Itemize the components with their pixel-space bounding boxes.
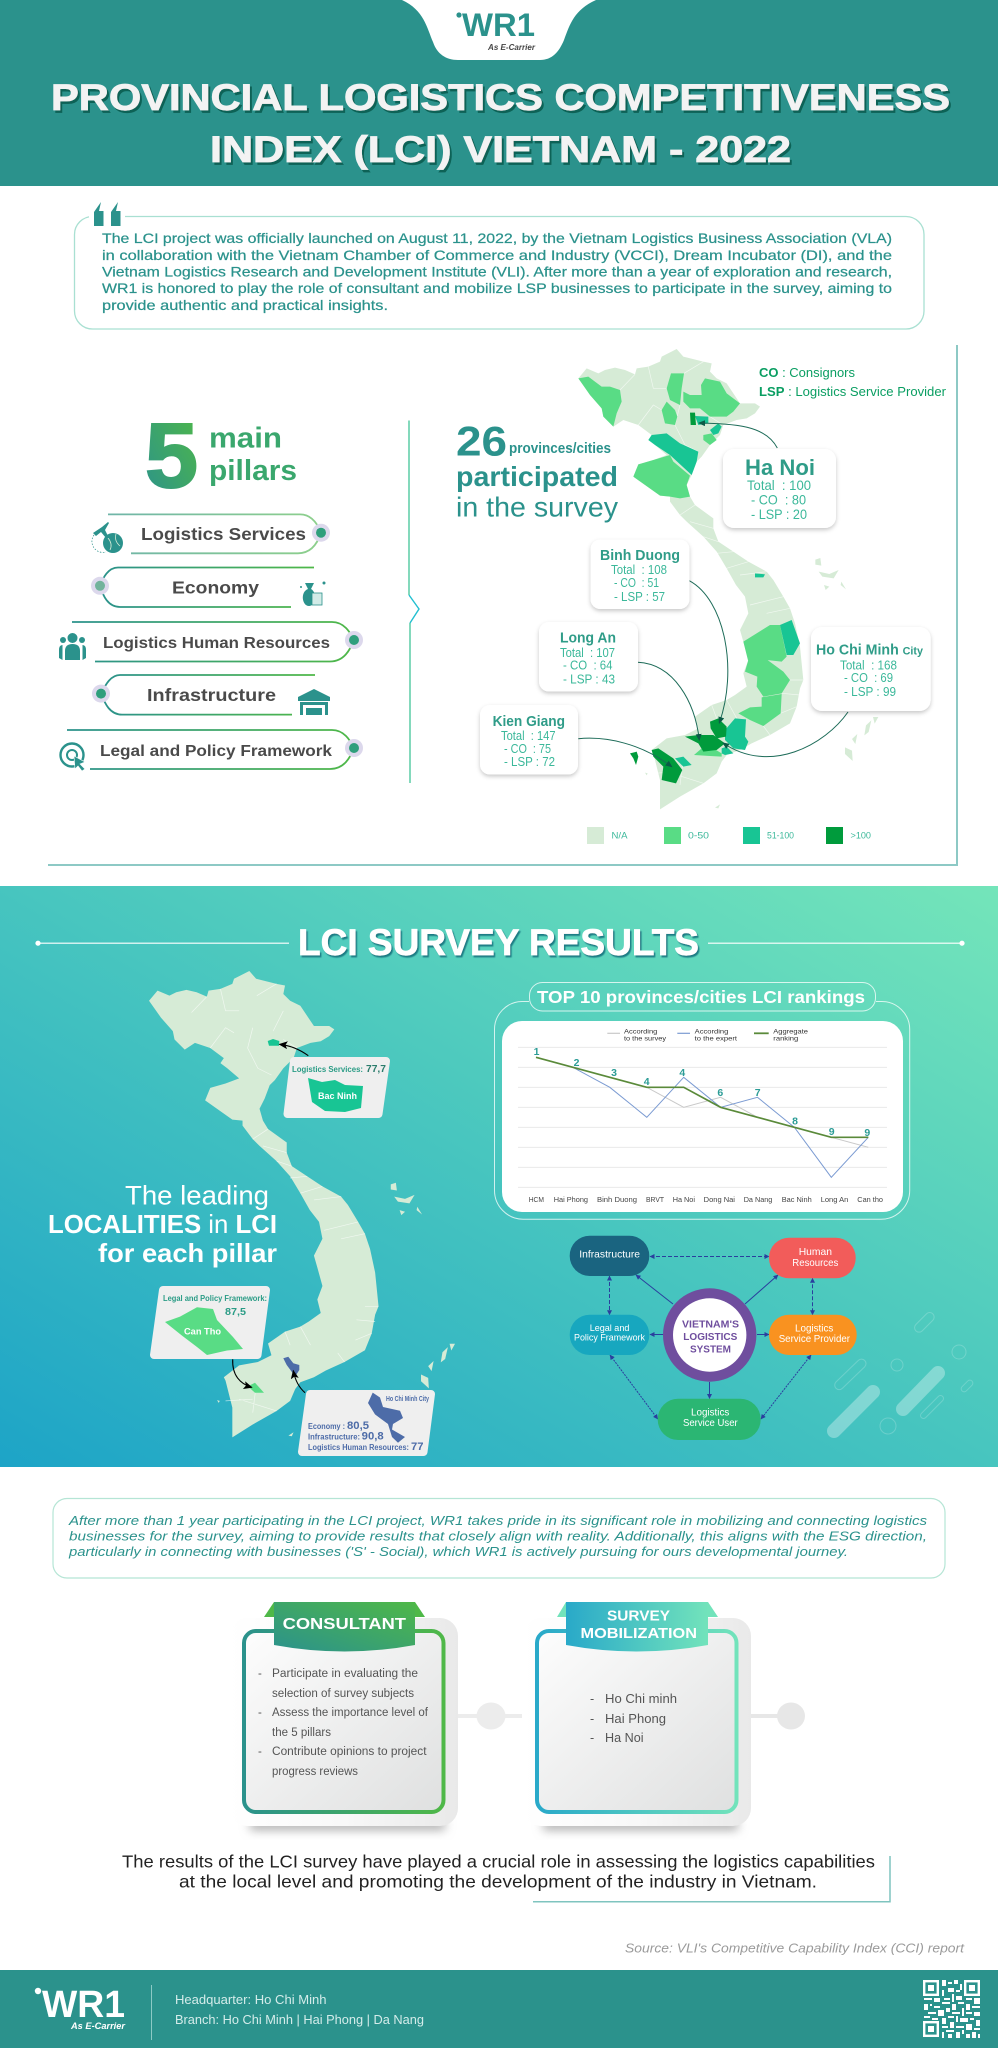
callout: Ha Noi: - LSP : 20 (751, 506, 807, 522)
callout: Binh Duong: - CO : 51 (614, 576, 659, 590)
list: consultant tasks: - (258, 1668, 262, 1680)
legend: CO and LSP definitions: CO : Consignors (759, 366, 855, 380)
callout: Kien Giang: - LSP : 72 (504, 755, 555, 769)
ribbon: MOBILIZATION (580, 1625, 697, 1642)
source note: Source: VLI's Competitive Capability Index (CCI) report (625, 1941, 965, 1956)
callout: Long An: Total : 107 (560, 646, 615, 660)
map legend: 0-50 (688, 830, 709, 840)
callout: Ha Noi (723, 449, 836, 528)
callout: Ho Chi Minh City: - CO : 69 (844, 671, 893, 685)
chart legend: According (624, 1029, 658, 1036)
list: consultant tasks: - (258, 1707, 262, 1719)
callout: Binh Duong: - LSP : 57 (614, 590, 665, 604)
pillar: Logistics Human Resources: Logistics Human Resources (103, 635, 330, 652)
closing note box (53, 1498, 945, 1578)
axis labels: Da Nang (744, 1195, 772, 1204)
closing note box: particularly in connecting with businesses ('S' - Social), which WR1 is actively pursuing for ours developmental journey. (68, 1544, 848, 1559)
callout: Bac Ninh (288, 1061, 386, 1114)
callout: Ha Noi: Ha Noi (745, 455, 815, 480)
decorative stripes (833, 1311, 974, 1434)
title (51, 77, 950, 170)
node: Human Resources: Resources (792, 1257, 838, 1269)
node: central circle: SYSTEM (690, 1344, 731, 1356)
icon: plane and globe (92, 522, 123, 553)
map legend (587, 827, 871, 844)
callout: Can Tho: 87,5 (225, 1306, 246, 1318)
list: consultant tasks: Assess the importance level of (272, 1707, 429, 1719)
pillar: Infrastructure (92, 675, 330, 715)
node: Infrastructure (570, 1236, 649, 1276)
chart legend: to the expert (695, 1035, 737, 1042)
map legend: 51-100 (767, 830, 794, 840)
list: survey locations: - (590, 1712, 594, 1726)
intro quote box (74, 202, 924, 329)
list: consultant tasks: - (258, 1746, 262, 1758)
pillar: Legal and Policy Framework (60, 730, 363, 771)
node: central circle (663, 1288, 756, 1382)
divider with chevron (409, 420, 419, 783)
icon: Ho Chi Minh City shape (368, 1393, 405, 1443)
chart legend: ranking (773, 1035, 799, 1042)
axis labels: Hai Phong (554, 1195, 588, 1204)
list: consultant tasks: the 5 pillars (272, 1727, 331, 1739)
callout: Ho Chi Minh City scores: 77 (411, 1441, 424, 1453)
icon: quote marks (94, 202, 120, 226)
rank labels: 1 (534, 1046, 540, 1058)
heading: 26 provinces (456, 418, 618, 522)
icon: money bag (300, 582, 326, 606)
section heading (35, 922, 965, 963)
heading: 5 main pillars (145, 405, 297, 507)
node: Logistics Service Provider: Service Provider (779, 1333, 850, 1345)
list: consultant tasks: selection of survey subjects (272, 1688, 414, 1700)
intro text: WR1 is honored to play the role of consultant and mobilize LSP businesses to participate in the survey, aiming to (102, 281, 892, 296)
callout: Binh Duong (590, 540, 690, 609)
rank labels: 2 (574, 1057, 580, 1069)
section heading: LCI SURVEY RESULTS (298, 922, 699, 963)
rank labels: 4 (644, 1076, 650, 1088)
callout: Can Tho: Legal and Policy Framework: (163, 1294, 267, 1303)
axis labels: Ha Noi (673, 1195, 695, 1204)
node: Logistics Service Provider (769, 1315, 857, 1355)
callout: Ho Chi Minh City scores: 80,5 (347, 1420, 369, 1432)
callout: Ho Chi Minh City scores: Ho Chi Minh City (386, 1396, 429, 1403)
connector: after consultant (458, 1702, 522, 1730)
list: consultant tasks: progress reviews (272, 1766, 358, 1778)
rank labels: 9 (864, 1127, 870, 1139)
callout: Ho Chi Minh City scores (302, 1393, 431, 1453)
rank labels: 4 (679, 1067, 685, 1079)
conclusion text: The results of the LCI survey have played a crucial role in assessing the logistics capabilities (122, 1852, 875, 1872)
node: central circle: LOGISTICS (683, 1331, 737, 1343)
callout: Long An: Long An (560, 631, 616, 647)
closing note box: After more than 1 year participating in the LCI project, WR1 takes pride in its significant role in mobilizing and connecting logistics (68, 1513, 928, 1528)
intro text: in collaboration with the Vietnam Chamber of Commerce and Industry (VCCI), Dream Incubator (DI), and the (102, 248, 892, 263)
footer addresses: Headquarter: Ho Chi Minh (175, 1993, 327, 2007)
provinces 0-50 (578, 373, 790, 757)
list: consultant tasks (258, 1668, 429, 1778)
axis labels: Can tho (857, 1195, 883, 1204)
closing note box: businesses for the survey, aiming to provide results that closely align with reality. Additionally, this aligns with the ESG direction, (69, 1529, 927, 1544)
text: leading localities: LOCALITIES in LCI (48, 1209, 277, 1239)
pillar: Legal and Policy Framework: Legal and Policy Framework (100, 743, 332, 760)
callout: Ho Chi Minh City: - LSP : 99 (844, 685, 896, 699)
list: consultant tasks: Participate in evaluating the (272, 1668, 418, 1680)
rank labels: 6 (717, 1087, 723, 1099)
node: Legal and Policy Framework: Legal and (590, 1323, 629, 1334)
callout: Kien Giang: Kien Giang (493, 714, 565, 730)
icon: target cursor (60, 744, 85, 771)
card: consultant (229, 1602, 458, 1830)
callout: Ha Noi: - CO : 80 (751, 492, 806, 508)
intro text: provide authentic and practical insights. (102, 298, 388, 313)
node: central circle: VIETNAM'S (682, 1319, 739, 1331)
callout: Ho Chi Minh City: Ho Chi Minh City (816, 642, 924, 658)
list: survey locations: Ho Chi minh (605, 1692, 677, 1706)
node: Human Resources: Human (799, 1246, 832, 1258)
callout: Ho Chi Minh City scores: 90,8 (362, 1430, 384, 1442)
axis labels: BRVT (646, 1195, 664, 1204)
list: survey locations: - (590, 1692, 594, 1706)
footer logo: As E-Carrier (70, 2021, 126, 2032)
callout: Kien Giang (480, 705, 578, 774)
node: Legal and Policy Framework (570, 1315, 649, 1355)
list: consultant tasks: Contribute opinions to project (272, 1746, 427, 1758)
conclusion text (122, 1852, 890, 1902)
footer (0, 1970, 998, 2048)
pillar: Logistics Services: Logistics Services (141, 524, 306, 544)
axis labels: Binh Duong (597, 1195, 637, 1204)
logo tab: WR1 (462, 7, 535, 43)
callout: Can Tho (154, 1290, 267, 1355)
heading: 26 provinces: participated (456, 461, 618, 492)
node: Logistics Service User: Logistics (691, 1407, 729, 1419)
chart: top 10 rankings (494, 982, 910, 1219)
axis labels: Dong Nai (704, 1195, 735, 1204)
chart grid (518, 1047, 887, 1187)
icon: Can Tho shape (165, 1307, 243, 1355)
panel: LCI survey results (0, 886, 998, 1467)
map: survey participation (578, 349, 878, 809)
callout: Binh Duong: Total : 108 (611, 563, 667, 577)
provinces 51-100 (648, 416, 800, 767)
ribbon: CONSULTANT (283, 1616, 406, 1633)
connector: after survey mobilization (751, 1702, 805, 1730)
card: survey mobilization (523, 1602, 751, 1830)
callout: Ho Chi Minh City scores: Infrastructure: (308, 1432, 360, 1442)
callout: Long An (539, 622, 638, 692)
heading: 26 provinces: provinces/cities (509, 441, 611, 457)
diagram: Vietnam's logistics system (570, 1236, 857, 1440)
list: survey locations: - (590, 1731, 594, 1745)
highlight: Bac Ninh (268, 1039, 279, 1046)
intro text (102, 231, 892, 313)
text: leading localities (48, 1180, 277, 1268)
node: Legal and Policy Framework: Policy Framework (574, 1333, 645, 1344)
chart legend: According (695, 1029, 729, 1036)
arrow: Bac Ninh (280, 1044, 308, 1056)
ribbon (264, 1602, 425, 1652)
list: survey locations (590, 1692, 677, 1745)
footer addresses (175, 1993, 424, 2027)
node: Logistics Service User: Service User (683, 1417, 738, 1429)
highlight: Ho Chi Minh City (283, 1357, 299, 1377)
logo tab (402, 0, 596, 60)
axis labels: HCM (529, 1195, 544, 1204)
heading: 26 provinces: 26 (456, 418, 507, 465)
series: expert (536, 1057, 868, 1177)
list: survey locations: Ha Noi (605, 1731, 644, 1745)
intro text: Vietnam Logistics Research and Development Institute (VLI). After more than a year of exploration and research, (102, 264, 892, 280)
rank labels: 9 (829, 1126, 835, 1138)
callout: Ha Noi: Total : 100 (747, 477, 811, 493)
icon: QR code (923, 1980, 981, 2038)
conclusion text: at the local level and promoting the development of the industry in Vietnam. (179, 1872, 817, 1892)
callout: Ho Chi Minh City: Total : 168 (840, 659, 897, 673)
pillar: Logistics Human Resources (59, 622, 363, 662)
node: Infrastructure: Infrastructure (579, 1249, 640, 1261)
heading: 5 main pillars: 5 (145, 405, 198, 507)
title: PROVINCIAL LOGISTICS COMPETITIVENESS (51, 77, 950, 118)
callout: Kien Giang: - CO : 75 (504, 742, 551, 756)
node: Human Resources (769, 1238, 856, 1278)
series: survey (536, 1057, 868, 1147)
node: Logistics Service Provider: Logistics (795, 1323, 833, 1335)
heading: 5 main pillars: pillars (209, 455, 297, 487)
callout: Bac Ninh: 77,7 (366, 1063, 386, 1075)
text: leading localities: for each pillar (98, 1238, 277, 1268)
footer addresses: Branch: Ho Chi Minh | Hai Phong | Da Nang (175, 2013, 424, 2027)
arrow: Ho Chi Minh City (293, 1371, 305, 1393)
callout: Binh Duong: Binh Duong (600, 548, 680, 564)
callout: Ho Chi Minh City (811, 627, 931, 711)
arrow: Can Tho (233, 1359, 252, 1387)
icon: people (59, 633, 86, 660)
footer logo: WR1 (42, 1984, 125, 2026)
intro text: The LCI project was officially launched on August 11, 2022, by the Vietnam Logistics Business Association (VLA) (102, 231, 892, 246)
rank labels: 7 (755, 1087, 761, 1099)
series: aggregate (536, 1057, 868, 1137)
map legend: >100 (850, 830, 871, 840)
icon: Bac Ninh shape (308, 1078, 363, 1112)
pillar: Economy (91, 568, 326, 607)
chart legend: Aggregate (773, 1029, 808, 1036)
header band (0, 0, 998, 186)
provinces over 100 (630, 413, 727, 783)
axis labels: Bac Ninh (782, 1195, 812, 1204)
rank labels (534, 1046, 870, 1139)
chart legend: to the survey (624, 1035, 667, 1042)
list: survey locations: Hai Phong (605, 1712, 666, 1726)
ribbon (557, 1602, 718, 1652)
chart title: TOP 10 provinces/cities LCI rankings (537, 987, 865, 1007)
callout: Ho Chi Minh City scores: Logistics Human Resources: (308, 1443, 409, 1452)
legend: CO and LSP definitions: LSP : Logistics Service Provider (759, 385, 946, 399)
rank labels: 8 (792, 1116, 798, 1128)
arrows (610, 1256, 812, 1419)
callout: Bac Ninh: Bac Ninh (318, 1091, 357, 1102)
axis labels: Long An (821, 1195, 848, 1204)
pillar: Infrastructure: Infrastructure (147, 685, 276, 705)
map legend: N/A (612, 830, 628, 840)
chart legend (607, 1029, 808, 1042)
logo tab: As E-Carrier (487, 42, 536, 52)
highlight: Can Tho (247, 1383, 264, 1393)
callout: Ho Chi Minh City scores: Economy : (308, 1422, 345, 1431)
callout: Long An: - CO : 64 (563, 659, 613, 673)
chart title (530, 982, 876, 1011)
heading: 5 main pillars: main (209, 422, 282, 454)
axis labels (529, 1195, 883, 1204)
arrows: map callouts (578, 423, 848, 767)
ribbon: SURVEY (607, 1608, 670, 1625)
callout: Kien Giang: Total : 147 (501, 729, 556, 743)
pillar: Logistics Services (92, 514, 330, 553)
title: INDEX (LCI) VIETNAM - 2022 (210, 129, 791, 170)
section frame (48, 345, 957, 865)
icon: warehouse (298, 689, 330, 715)
callout: Long An: - LSP : 43 (563, 672, 615, 686)
callout: Bac Ninh: Logistics Services: (292, 1064, 363, 1074)
text: leading localities: The leading (125, 1180, 269, 1210)
legend: CO and LSP definitions (759, 366, 946, 399)
node: Logistics Service User (658, 1399, 761, 1440)
heading: 26 provinces: in the survey (456, 492, 618, 522)
map: leading localities (149, 971, 455, 1437)
rank labels: 3 (611, 1067, 617, 1079)
pillar: Economy: Economy (172, 578, 259, 598)
callout: Can Tho: Can Tho (184, 1327, 221, 1338)
